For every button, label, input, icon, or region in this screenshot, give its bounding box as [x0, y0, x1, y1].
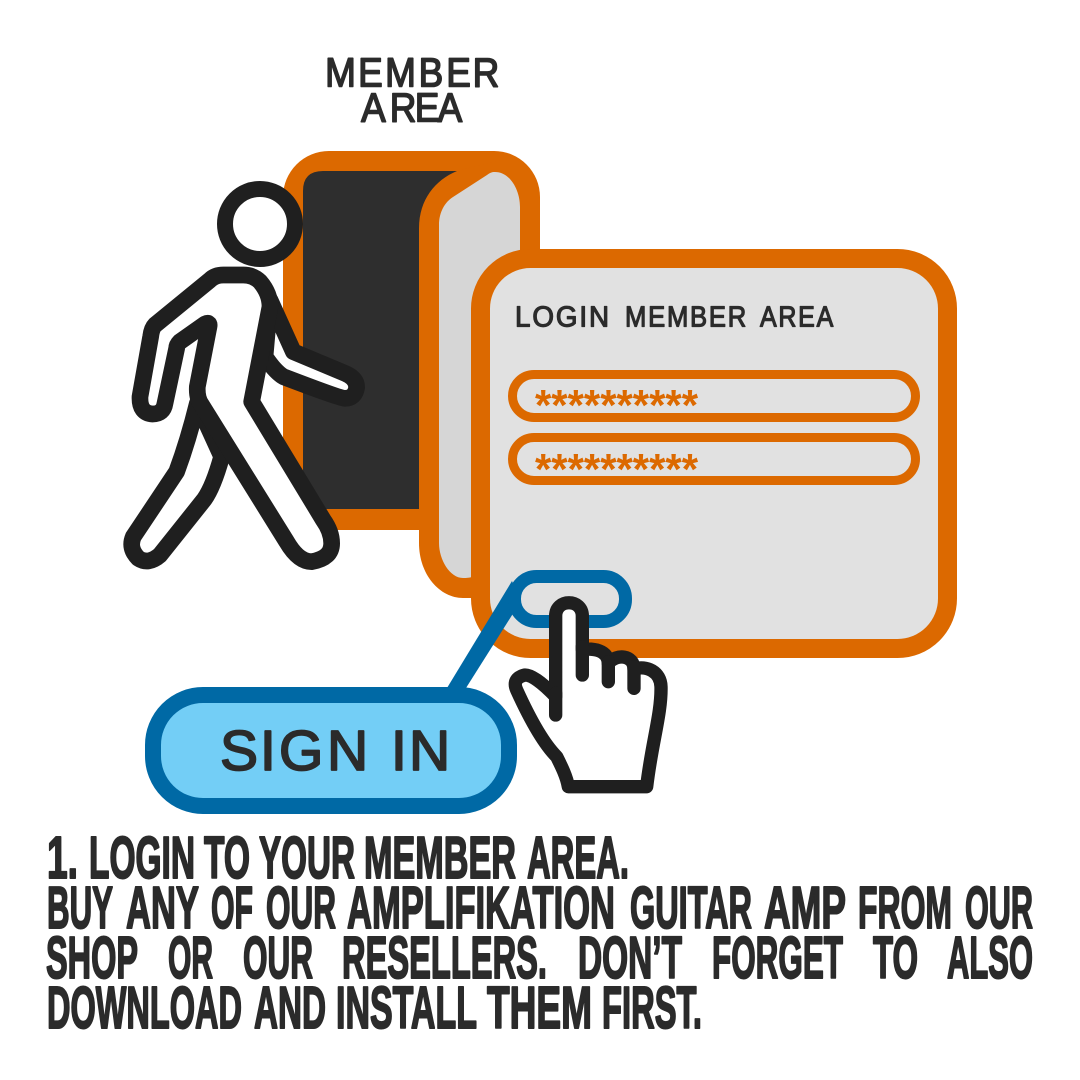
icon: walking person — [132, 189, 357, 562]
step heading — [47, 825, 629, 891]
body line 2: DON’T — [578, 925, 682, 991]
body line 3: THEM — [487, 975, 592, 1041]
panel: login form — [480, 258, 948, 648]
person head — [225, 189, 295, 259]
body line 2: OUR — [243, 925, 313, 991]
input: username — [512, 374, 916, 430]
heading: member area — [325, 51, 499, 131]
body line 3: INSTALL — [336, 975, 477, 1041]
step heading: YOUR — [259, 825, 355, 891]
body line 1 — [47, 875, 1033, 941]
body line 2 — [46, 925, 1033, 991]
step heading: 1. — [47, 825, 78, 891]
callout connector — [447, 581, 520, 688]
input: password: ********** — [535, 445, 699, 494]
text block: instructions — [46, 825, 1033, 1041]
body line 1: OF — [211, 875, 253, 941]
body line 3: DOWNLOAD — [47, 975, 242, 1041]
icon: pointing hand — [515, 603, 661, 787]
small sign in button — [514, 576, 626, 622]
step heading: TO — [204, 825, 250, 891]
form title: LOGIN — [515, 302, 611, 334]
step heading: AREA. — [527, 825, 629, 891]
input: password — [512, 438, 916, 494]
body line 3: AND — [254, 975, 326, 1041]
input: username: ********** — [535, 381, 699, 430]
body line 1: GUITAR — [630, 875, 752, 941]
heading: member area: MEMBER — [325, 51, 499, 96]
body line 2: RESELLERS. — [342, 925, 547, 991]
body line 2: OR — [168, 925, 213, 991]
person body — [132, 275, 357, 562]
step heading: LOGIN — [89, 825, 195, 891]
form title: MEMBER — [625, 302, 748, 334]
body line 1: AMP — [764, 875, 846, 941]
step heading: MEMBER — [364, 825, 516, 891]
form title: AREA — [760, 302, 835, 334]
heading: member area: AREA — [361, 86, 462, 131]
body line 3 — [47, 975, 702, 1041]
body line 2: FORGET — [712, 925, 843, 991]
body line 1: AMPLIFIKATION — [347, 875, 615, 941]
door frame — [283, 151, 540, 530]
body line 2: SHOP — [46, 925, 138, 991]
body line 1: BUY — [47, 875, 113, 941]
body line 1: ANY — [126, 875, 199, 941]
body line 1: FROM — [858, 875, 952, 941]
body line 1: OUR — [266, 875, 336, 941]
body line 2: TO — [873, 925, 918, 991]
form title — [515, 302, 835, 334]
callout: sign in button: SIGN IN — [220, 719, 450, 783]
door leaf — [419, 160, 520, 598]
callout: sign in button — [153, 695, 509, 806]
body line 3: FIRST. — [602, 975, 702, 1041]
